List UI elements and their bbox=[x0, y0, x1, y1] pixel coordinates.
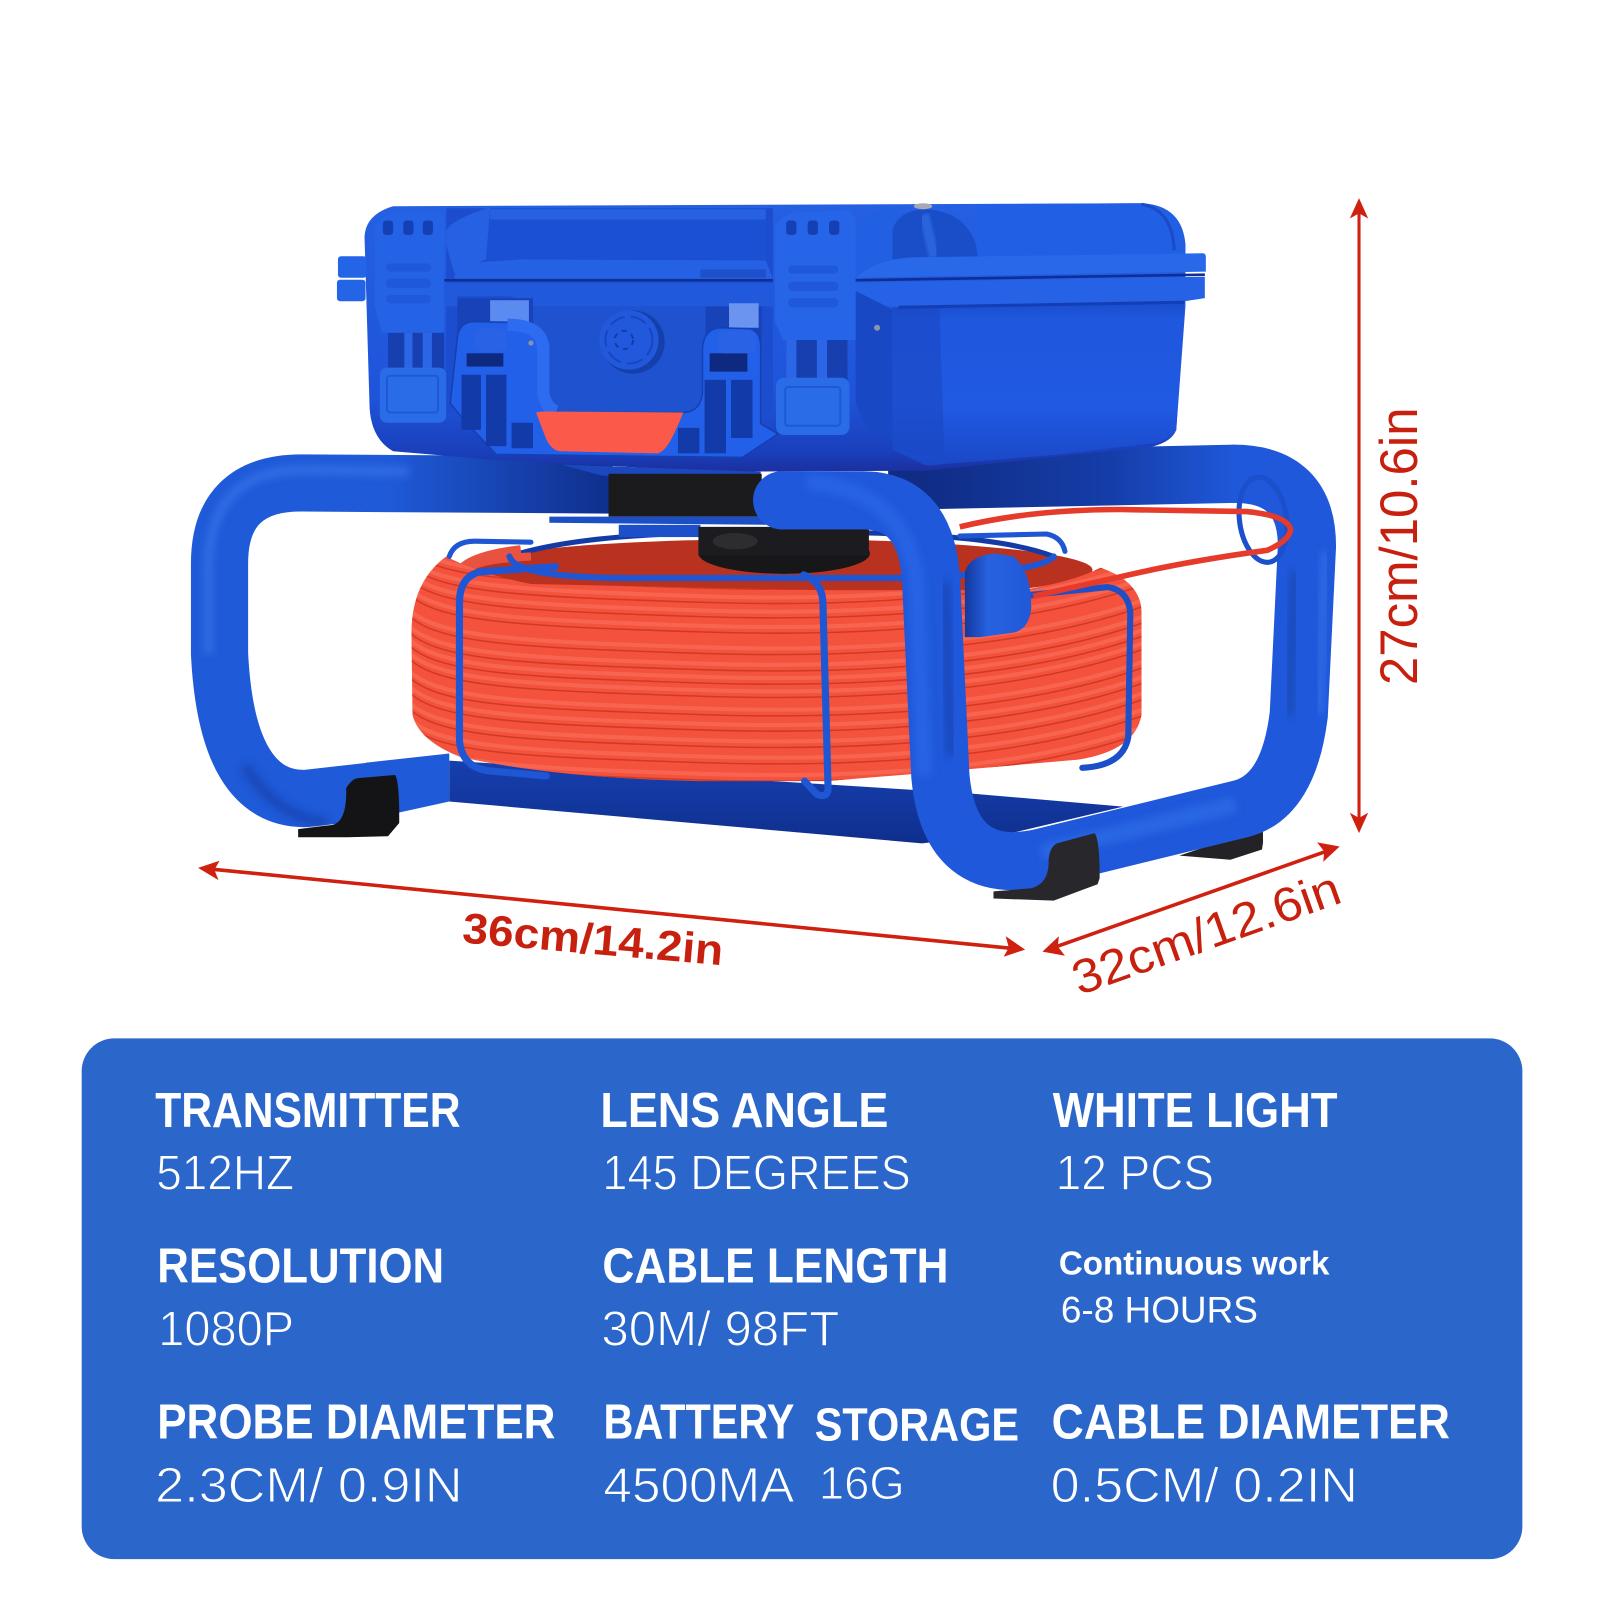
recessed panel bbox=[533, 306, 706, 413]
case right lid bbox=[853, 203, 1206, 466]
foot: front right bbox=[993, 833, 1100, 901]
spec: resolution: 1080P bbox=[158, 1303, 294, 1357]
right body face bbox=[892, 301, 1184, 466]
spec: continuous work: 6-8 HOURS bbox=[1061, 1289, 1258, 1330]
coil body bbox=[411, 556, 1142, 781]
spec: continuous work: Continuous work bbox=[1059, 1245, 1330, 1282]
spec: battery: 4500MA bbox=[603, 1459, 795, 1513]
spec: storage: STORAGE bbox=[815, 1399, 1019, 1451]
cable clamp bbox=[965, 553, 1031, 637]
left channel bbox=[457, 298, 533, 410]
wire cage bbox=[449, 534, 1130, 796]
hoop back arc bbox=[510, 533, 1054, 556]
spec: transmitter: 512HZ bbox=[156, 1147, 294, 1201]
screws bbox=[874, 325, 880, 331]
case silhouette bbox=[365, 203, 1185, 472]
spec: storage: 16G bbox=[819, 1457, 905, 1509]
hub bbox=[619, 525, 870, 574]
spec: storage bbox=[815, 1399, 1019, 1509]
coil inner loops bbox=[456, 549, 531, 578]
right latch bbox=[775, 210, 856, 435]
panel: specifications bbox=[82, 1038, 1522, 1559]
dimension: height bbox=[1350, 198, 1429, 833]
spec: cable length: 30M/ 98FT bbox=[601, 1303, 839, 1357]
spec: battery: BATTERY bbox=[603, 1396, 794, 1450]
corner plate bbox=[856, 291, 892, 441]
spec: probe diameter: PROBE DIAMETER bbox=[157, 1396, 555, 1450]
mount plate and black strap bbox=[549, 465, 766, 525]
back frame tube bbox=[888, 474, 1235, 481]
spec: cable diameter bbox=[1051, 1396, 1450, 1513]
spec: probe diameter bbox=[155, 1396, 555, 1513]
left hinge pins bbox=[337, 256, 367, 301]
cable guide ring bbox=[1234, 474, 1292, 565]
spec: cable diameter: CABLE DIAMETER bbox=[1052, 1396, 1450, 1450]
bottom cross bar bbox=[449, 761, 1123, 843]
left latch bbox=[375, 210, 446, 423]
spec: white light: WHITE LIGHT bbox=[1053, 1084, 1338, 1138]
depth arrow bbox=[1042, 842, 1340, 956]
spec: cable length bbox=[601, 1239, 949, 1357]
spec: lens angle: 145 DEGREES bbox=[602, 1147, 911, 1201]
spec: white light bbox=[1053, 1084, 1338, 1201]
upper rim bbox=[856, 253, 1206, 278]
free cable end bbox=[960, 510, 1291, 596]
panel background bbox=[82, 1038, 1522, 1559]
lid flange bbox=[454, 259, 773, 279]
spec: lens angle bbox=[600, 1084, 911, 1201]
case centre front bbox=[444, 207, 778, 457]
height arrow bbox=[1350, 198, 1368, 833]
spec: transmitter: TRANSMITTER bbox=[155, 1084, 460, 1138]
spec: continuous work bbox=[1059, 1245, 1330, 1330]
coil windings bbox=[412, 560, 1142, 782]
width arrow bbox=[198, 861, 1025, 957]
dimension: width bbox=[198, 861, 1025, 975]
cable reel bbox=[404, 533, 1149, 781]
lid pressure valve button bbox=[599, 310, 665, 374]
width label: 36cm/14.2in bbox=[461, 905, 725, 975]
foot: left bbox=[298, 775, 399, 837]
spec: transmitter bbox=[155, 1084, 460, 1201]
red handle grip bbox=[536, 411, 683, 453]
spec: lens angle: LENS ANGLE bbox=[600, 1084, 888, 1138]
left frame tube bbox=[208, 470, 613, 823]
dimension: depth bbox=[1042, 842, 1348, 1006]
lid corner column bbox=[892, 209, 978, 259]
handle bbox=[450, 322, 778, 457]
carrying case bbox=[337, 203, 1206, 472]
lower rim bbox=[853, 277, 1205, 307]
spec: resolution bbox=[157, 1239, 444, 1357]
product illustration: camera reel with carrying case bbox=[208, 203, 1325, 901]
spec: cable length: CABLE LENGTH bbox=[602, 1239, 949, 1293]
reel top disc bbox=[459, 539, 1093, 600]
front frame tube bbox=[753, 471, 1325, 861]
foot: rear right bbox=[1179, 797, 1263, 860]
spec: battery bbox=[603, 1396, 795, 1513]
depth label: 32cm/12.6in bbox=[1065, 862, 1348, 1006]
spec: cable diameter: 0.5CM/ 0.2IN bbox=[1051, 1459, 1358, 1513]
height label: 27cm/10.6in bbox=[1370, 407, 1429, 685]
lower rim bbox=[444, 283, 773, 306]
spec: resolution: RESOLUTION bbox=[157, 1239, 444, 1293]
spec: probe diameter: 2.3CM/ 0.9IN bbox=[155, 1459, 463, 1513]
spec: white light: 12 PCS bbox=[1056, 1147, 1214, 1201]
